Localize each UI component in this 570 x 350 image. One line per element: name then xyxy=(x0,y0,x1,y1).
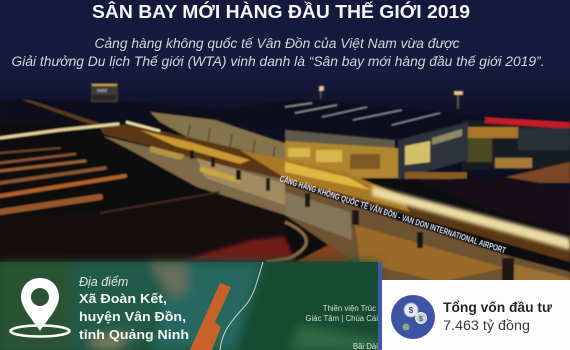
terminal facade overhang xyxy=(285,130,395,150)
intro line 1: Cảng hàng không quốc tế Vân Đồn của Việt Nam vừa được xyxy=(94,36,460,51)
icon: coins: $ xyxy=(419,316,423,323)
location line 3: tỉnh Quảng Ninh xyxy=(79,328,189,342)
lit roof of departures xyxy=(372,186,570,250)
location label: Địa điểm xyxy=(79,275,128,289)
label: Thiền viện: Thiền viện Trúc xyxy=(323,304,376,313)
location line 2: huyện Vân Đồn, xyxy=(79,310,186,324)
icon: coins xyxy=(391,295,435,339)
airport night photo xyxy=(0,83,570,282)
panel: location map xyxy=(0,262,378,350)
map labels xyxy=(305,304,378,350)
dark forecourt xyxy=(418,177,570,233)
wall pillars xyxy=(190,150,514,282)
glass facade xyxy=(398,122,468,180)
icon: coins: $ xyxy=(409,306,414,315)
light streak xyxy=(0,124,118,138)
diagonal service road xyxy=(100,192,220,213)
investment value: 7.463 tỷ đồng xyxy=(443,318,530,333)
location line 1: Xã Đoàn Kết, xyxy=(79,292,167,306)
terminal facade xyxy=(285,141,398,178)
label: Giác Tâm: Giác Tâm | Chùa Cái xyxy=(305,314,378,323)
location text xyxy=(79,275,189,342)
investment heading: Tổng vốn đầu tư xyxy=(443,300,552,315)
panel: investment xyxy=(382,280,570,350)
map terrain xyxy=(0,262,70,350)
upper deck xyxy=(150,112,285,160)
intro text xyxy=(12,36,544,69)
far road xyxy=(22,100,105,126)
runway xyxy=(190,283,231,350)
blue divider strip xyxy=(378,262,382,350)
parking rows xyxy=(0,148,125,212)
amber road xyxy=(100,124,570,262)
road xyxy=(220,262,263,350)
terminal roof xyxy=(180,100,488,138)
lamp posts xyxy=(319,86,463,109)
lower wall right xyxy=(285,184,570,282)
icon: location pin xyxy=(10,278,70,336)
intro line 2: Giải thưởng Du lịch Thế giới (WTA) vinh danh là “Sân bay mới hàng đầu thế giới 2019”. xyxy=(12,54,544,69)
right annex building xyxy=(462,120,570,170)
red-lit ground xyxy=(183,236,295,262)
title: SÂN BAY MỚI HÀNG ĐẦU THẾ GIỚI 2019 xyxy=(92,1,470,22)
control tower xyxy=(91,83,118,102)
lower wall xyxy=(103,136,285,215)
ground xyxy=(0,112,570,282)
curved ramp xyxy=(266,222,306,262)
